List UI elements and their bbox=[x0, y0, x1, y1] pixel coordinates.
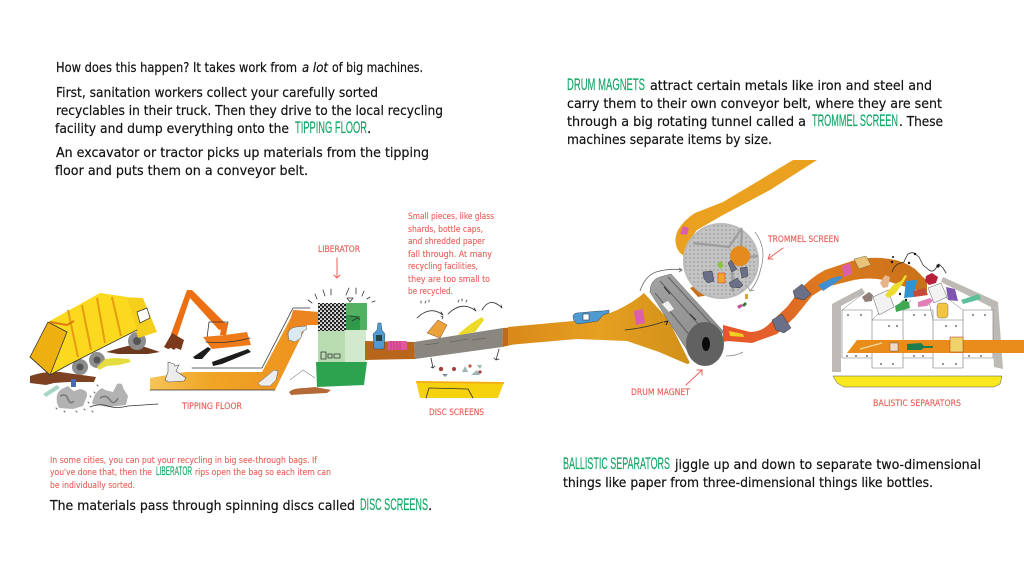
text block: disc screens: . bbox=[428, 498, 432, 514]
text block: intro: An excavator or tractor picks up materials from the tipping bbox=[56, 145, 429, 161]
note: small pieces: shards, bottle caps, bbox=[408, 225, 483, 235]
illustration: ballistic separator yellow tray bbox=[833, 376, 1002, 387]
text block: intro: recyclables in their truck. Then they drive to the local recycling bbox=[56, 103, 443, 119]
label: trommel screen with arrow bbox=[767, 235, 839, 259]
note: liberator bags: you've done that, then the bbox=[50, 468, 152, 478]
illustration: drum magnet bbox=[640, 268, 743, 366]
text block: intro: How does this happen? It takes work from bbox=[56, 60, 297, 76]
note: small pieces bbox=[408, 212, 494, 297]
text block: disc screens: The materials pass through spinning discs called bbox=[49, 498, 355, 514]
label: liberator with arrow bbox=[318, 245, 360, 278]
illustration: trash bags on the ground bbox=[43, 379, 158, 412]
text block: ballistic separators: jiggle up and down to separate two-dimensional bbox=[674, 457, 981, 473]
note: small pieces: be recycled. bbox=[408, 287, 453, 297]
illustration: short belt with bottle and can bbox=[365, 323, 415, 360]
illustration: garbage truck bbox=[30, 293, 160, 385]
note: liberator bags: In some cities, you can put your recycling in big see-through bags. If bbox=[50, 456, 318, 466]
text block: intro bbox=[55, 60, 443, 179]
note: liberator bags: rips open the bag so each item can bbox=[195, 468, 331, 478]
text block: ballistic separators: things like paper from three-dimensional things like bottles. bbox=[563, 475, 933, 491]
illustration: long conveyor into drum magnet bbox=[508, 293, 690, 364]
note: small pieces: fall through. At many bbox=[408, 250, 492, 260]
text block: drum magnets and trommel screen: TROMMEL SCREEN bbox=[812, 112, 898, 130]
label: trommel screen with arrow: TROMMEL SCREEN bbox=[767, 235, 839, 245]
text block: intro: facility and dump everything onto the bbox=[55, 121, 289, 137]
illustration: trommel screen bbox=[684, 224, 763, 309]
illustration: excavator bbox=[164, 290, 251, 366]
text block: intro: of big machines. bbox=[332, 60, 423, 76]
text block: drum magnets and trommel screen: through a big rotating tunnel called a bbox=[567, 114, 806, 130]
note: small pieces: Small pieces, like glass bbox=[408, 212, 494, 222]
text block: drum magnets and trommel screen: attract certain metals like iron and steel and bbox=[650, 78, 932, 94]
text block: intro: a lot bbox=[302, 60, 329, 76]
text block: drum magnets and trommel screen: machines separate items by size. bbox=[567, 132, 772, 148]
text block: drum magnets and trommel screen bbox=[567, 76, 943, 148]
label: drum magnet with arrow bbox=[631, 370, 702, 398]
text block: intro: TIPPING FLOOR bbox=[295, 119, 367, 137]
note: liberator bags: be individually sorted. bbox=[50, 481, 135, 491]
text block: drum magnets and trommel screen: DRUM MAGNETS bbox=[567, 76, 645, 94]
illustration: ballistic separator housing bbox=[832, 277, 1024, 372]
text block: ballistic separators bbox=[563, 455, 981, 491]
label: balistic separators: BALISTIC SEPARATORS bbox=[873, 399, 961, 409]
illustration: liberator machine bbox=[289, 288, 375, 395]
illustration: disc screens bbox=[414, 299, 520, 377]
illustration: sorted conveyor to ballistic separator bbox=[723, 256, 927, 343]
illustration: disc screen collection bin bbox=[416, 381, 504, 398]
illustration: upper conveyor to trommel bbox=[675, 160, 817, 262]
illustration: tipping floor conveyor bbox=[150, 308, 318, 390]
note: small pieces: recycling facilities, bbox=[408, 262, 478, 272]
text block: drum magnets and trommel screen: carry them to their own conveyor belt, where they are sent bbox=[567, 96, 942, 112]
text block: drum magnets and trommel screen: . These bbox=[899, 114, 943, 130]
illustration: items falling into separators bbox=[862, 253, 981, 318]
text block: intro: floor and puts them on a conveyor belt. bbox=[55, 163, 308, 179]
label: disc screens: DISC SCREENS bbox=[429, 408, 484, 418]
text block: intro: First, sanitation workers collect your carefully sorted bbox=[56, 85, 378, 101]
note: small pieces: and shredded paper bbox=[408, 237, 485, 247]
note: liberator bags bbox=[50, 456, 331, 491]
text block: ballistic separators: BALLISTIC SEPARATORS bbox=[563, 455, 670, 473]
label: tipping floor: TIPPING FLOOR bbox=[181, 402, 242, 412]
note: small pieces: they are too small to bbox=[408, 275, 490, 285]
label: liberator with arrow: LIBERATOR bbox=[318, 245, 360, 255]
note: liberator bags: LIBERATOR bbox=[156, 466, 192, 478]
label: drum magnet with arrow: DRUM MAGNET bbox=[631, 388, 690, 398]
text block: disc screens: DISC SCREENS bbox=[360, 496, 428, 514]
text block: intro: . bbox=[367, 121, 371, 137]
